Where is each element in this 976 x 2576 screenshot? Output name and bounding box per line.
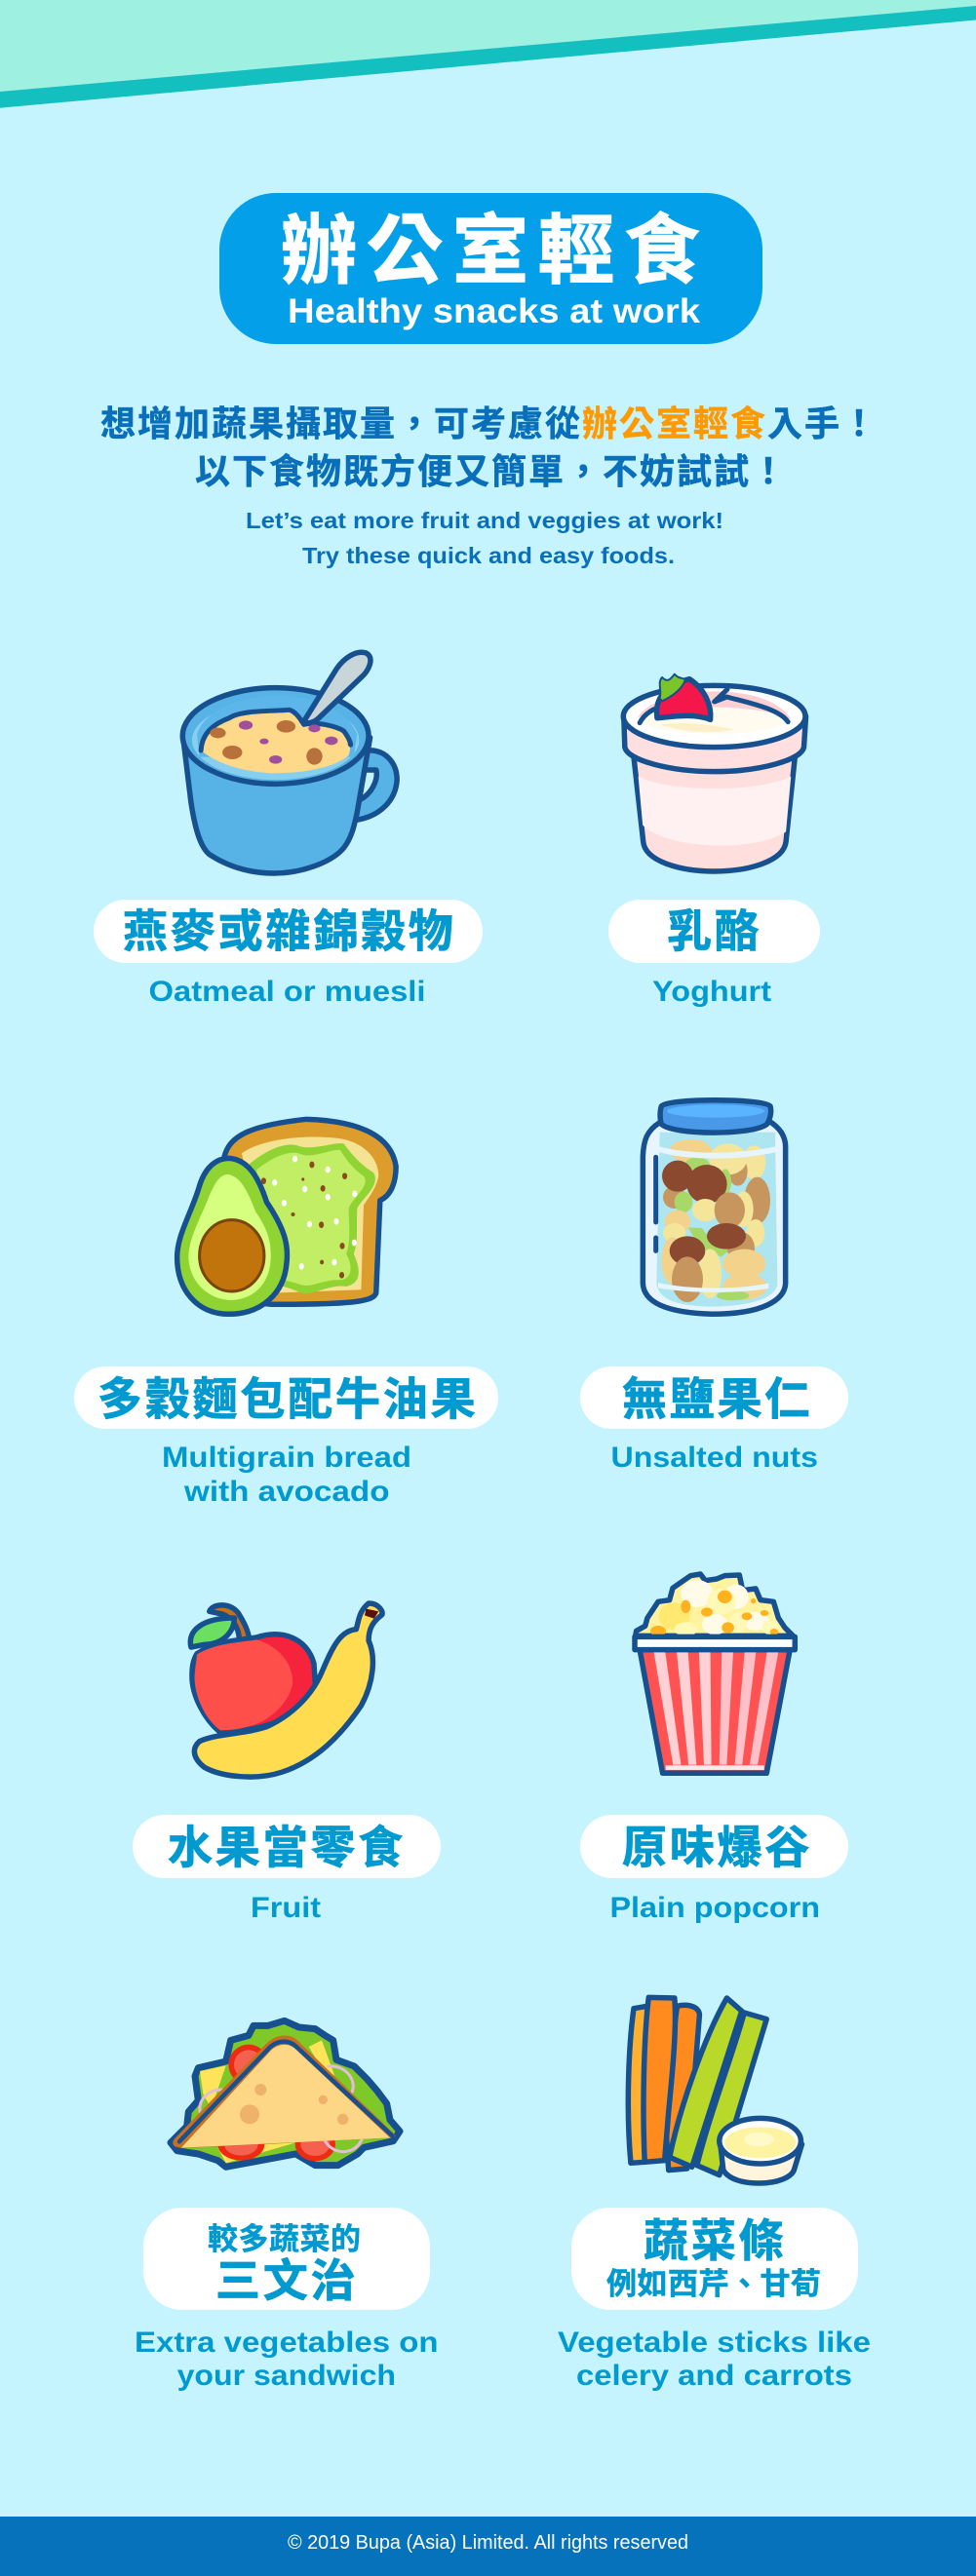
label: vegetable sticks: Vegetable sticks like bbox=[558, 2326, 871, 2359]
label: multigrain bread with avocado: with avocado bbox=[183, 1476, 390, 1508]
label: yoghurt: Yoghurt bbox=[652, 976, 771, 1008]
label: sandwich with extra vegetables: 三文治 bbox=[215, 2255, 358, 2306]
label: fruit: 水果當零食 bbox=[168, 1823, 406, 1873]
intro text: Let’s eat more fruit and veggies at work! bbox=[246, 508, 723, 533]
label: vegetable sticks: celery and carrots bbox=[576, 2360, 852, 2392]
intro text: 以下食物既方便又簡單，不妨試試！ bbox=[195, 443, 788, 494]
label: vegetable sticks: 蔬菜條 bbox=[644, 2215, 786, 2266]
icon: avocado toast bbox=[177, 1119, 396, 1314]
icon: popcorn bucket bbox=[635, 1574, 795, 1773]
icon: jar of unsalted nuts bbox=[643, 1100, 786, 1314]
label: multigrain bread with avocado bbox=[74, 1366, 498, 1508]
label: unsalted nuts: Unsalted nuts bbox=[610, 1442, 818, 1474]
icon: yoghurt cup with strawberry bbox=[623, 674, 806, 871]
label: vegetable sticks: 例如西芹、甘荀 bbox=[606, 2267, 821, 2301]
label: multigrain bread with avocado: 多穀麵包配牛油果 bbox=[98, 1374, 478, 1425]
label: unsalted nuts bbox=[580, 1366, 848, 1474]
label: unsalted nuts: 無鹽果仁 bbox=[622, 1374, 812, 1425]
label: yoghurt bbox=[608, 900, 820, 1008]
label: plain popcorn: 原味爆谷 bbox=[622, 1823, 812, 1873]
intro text bbox=[100, 396, 878, 568]
footer bbox=[0, 2517, 976, 2576]
label: vegetable sticks bbox=[558, 2208, 871, 2392]
intro text: Try these quick and easy foods. bbox=[302, 543, 675, 568]
label: sandwich with extra vegetables: your sandwich bbox=[177, 2360, 396, 2392]
label: fruit bbox=[133, 1815, 441, 1924]
label: sandwich with extra vegetables bbox=[135, 2208, 439, 2392]
label: fruit: Fruit bbox=[251, 1892, 321, 1924]
title badge: Healthy snacks at work bbox=[288, 292, 701, 330]
header banner: mint wedge with teal stripe bbox=[0, 0, 976, 108]
title badge bbox=[219, 193, 762, 344]
label: plain popcorn bbox=[580, 1815, 848, 1924]
label: oatmeal or muesli bbox=[94, 900, 483, 1008]
label: oatmeal or muesli: Oatmeal or muesli bbox=[148, 976, 425, 1008]
label: plain popcorn: Plain popcorn bbox=[610, 1892, 820, 1924]
footer: © 2019 Bupa (Asia) Limited. All rights reserved bbox=[288, 2532, 688, 2554]
icon: oatmeal mug bbox=[182, 652, 397, 873]
icon: apple and banana bbox=[190, 1603, 382, 1777]
icon: vegetable sticks with dip bbox=[628, 1997, 801, 2183]
label: yoghurt: 乳酪 bbox=[667, 906, 762, 957]
label: oatmeal or muesli: 燕麥或雜錦穀物 bbox=[123, 906, 456, 957]
label: multigrain bread with avocado: Multigrain bread bbox=[162, 1442, 411, 1474]
label: sandwich with extra vegetables: Extra vegetables on bbox=[135, 2326, 439, 2359]
label: sandwich with extra vegetables: 較多蔬菜的 bbox=[208, 2222, 361, 2256]
icon: sandwich bbox=[171, 2020, 400, 2167]
title badge: 辦公室輕食 bbox=[281, 208, 710, 293]
intro text: 想增加蔬果攝取量，可考慮從辦公室輕食入手！ bbox=[100, 396, 878, 446]
